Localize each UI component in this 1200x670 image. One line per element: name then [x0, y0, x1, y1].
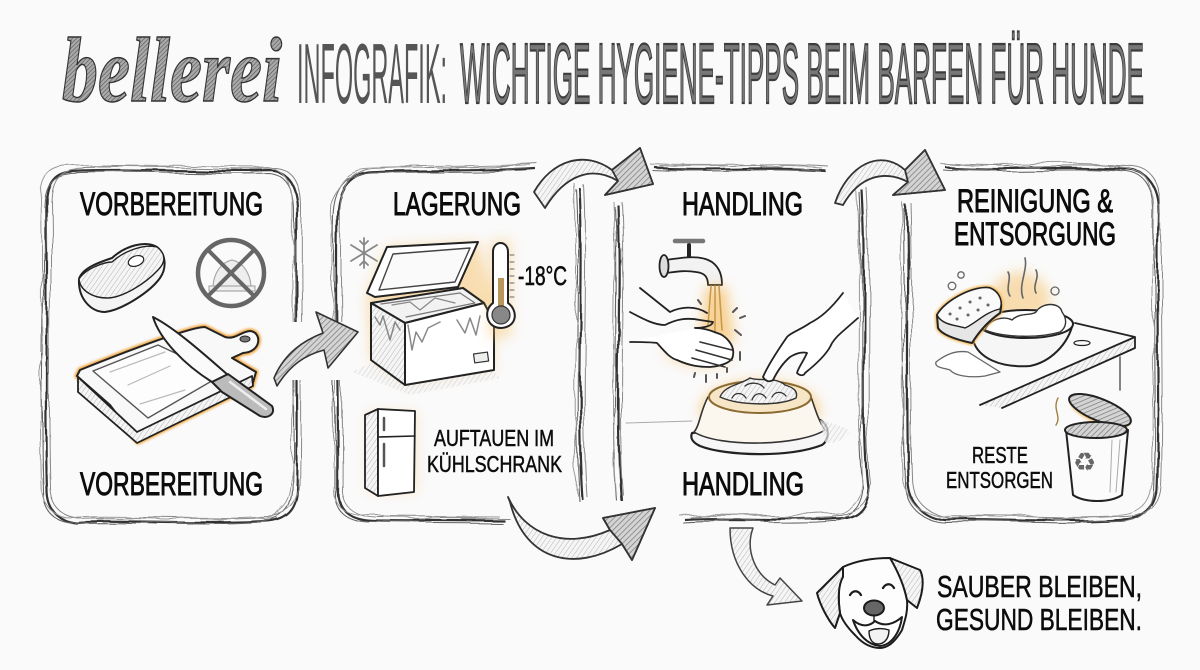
panel border	[901, 163, 1162, 523]
icon: table	[980, 323, 1135, 408]
icon: faucet	[660, 241, 722, 285]
icon: no pets bell	[198, 240, 264, 306]
title header	[62, 19, 1144, 122]
heading: VORBEREITUNG	[80, 186, 263, 222]
label: dispose: RESTE	[972, 442, 1028, 468]
icon: meat	[79, 244, 165, 312]
panel: Handling	[613, 164, 872, 522]
icon: hand over bowl	[763, 293, 858, 381]
icon: cutting board and knife	[77, 317, 273, 443]
arrow: Handling to Reinigung	[835, 150, 945, 205]
panel border	[41, 166, 302, 524]
slogan	[936, 569, 1142, 637]
arrow: Lagerung to Handling bottom	[508, 497, 655, 560]
arrow: Handling to dog	[730, 528, 802, 605]
temperature value: -18°C	[518, 261, 567, 291]
label: thawing: AUFTAUEN IM	[434, 425, 554, 451]
heading: REINIGUNG &	[957, 183, 1113, 219]
panel: Vorbereitung	[41, 166, 302, 524]
logo: bellerei: bellerei	[62, 19, 282, 121]
panel: Lagerung	[331, 164, 587, 523]
icon: snowflake	[351, 238, 377, 268]
icon: dog bowl	[626, 378, 850, 454]
label: thawing	[427, 425, 563, 477]
icon: thermometer	[487, 240, 515, 338]
icon: happy dog	[817, 558, 923, 648]
icon: sponge	[937, 288, 1001, 343]
label: dispose	[946, 442, 1053, 493]
icon: fridge	[365, 409, 416, 496]
title header: INFOGRAFIK:	[297, 27, 447, 122]
heading: LAGERUNG	[393, 186, 521, 222]
arrow: Lagerung to Handling top	[534, 148, 653, 208]
icon: chest freezer	[352, 242, 500, 395]
label: thawing: KÜHLSCHRANK	[427, 451, 563, 477]
heading: ENTSORGUNG	[954, 216, 1116, 252]
heading: HANDLING	[682, 186, 803, 222]
heading	[954, 183, 1116, 252]
panel border	[613, 164, 872, 522]
label: HANDLING	[682, 466, 804, 502]
icon: trash can	[1056, 387, 1135, 501]
icon: spill	[936, 352, 1000, 377]
icon: recycle symbol: ♻	[1073, 448, 1096, 478]
label: dispose: ENTSORGEN	[946, 467, 1053, 493]
icon: water stream and hands	[630, 286, 745, 382]
arrow: Vorbereitung to Lagerung	[274, 312, 358, 386]
label: VORBEREITUNG	[80, 466, 263, 502]
panel: Reinigung und Entsorgung	[901, 163, 1162, 523]
icon: bowl with foam and steam	[948, 258, 1073, 366]
panel border	[331, 164, 587, 523]
